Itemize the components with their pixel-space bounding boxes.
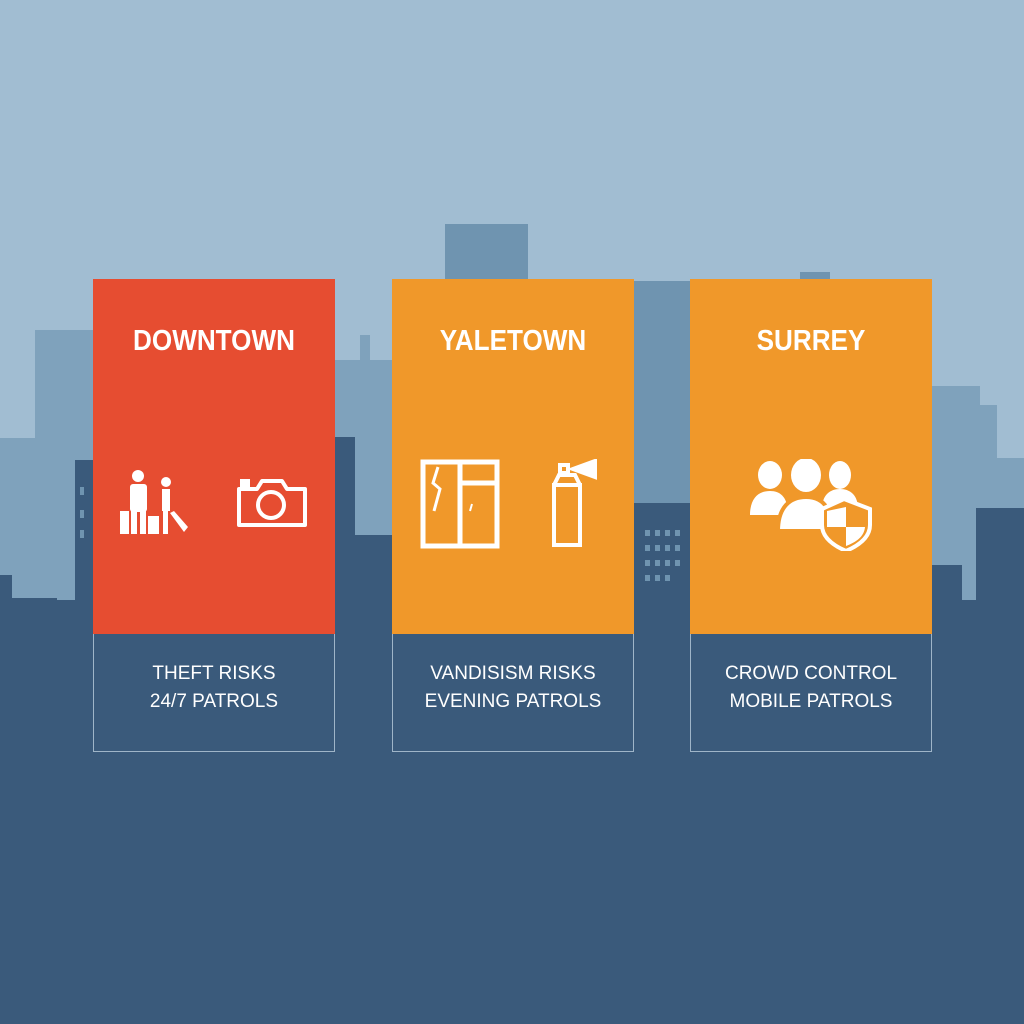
- icon: crowd with shield: [750, 459, 872, 551]
- icon: travelers with luggage: [120, 470, 188, 534]
- text block: downtown: [93, 634, 335, 752]
- panel: yaletown: [392, 279, 634, 634]
- text block: downtown: 24/7 PATROLS: [150, 691, 278, 712]
- heading: yaletown: YALETOWN: [440, 325, 586, 357]
- panel: downtown: [93, 279, 335, 634]
- icon: camera: [237, 479, 307, 527]
- text block: surrey: CROWD CONTROL: [725, 663, 897, 684]
- text block: yaletown: [392, 634, 634, 752]
- text block: downtown: THEFT RISKS: [152, 663, 276, 684]
- text block: surrey: MOBILE PATROLS: [730, 691, 892, 712]
- heading: surrey: SURREY: [757, 325, 865, 357]
- text block: yaletown: EVENING PATROLS: [425, 691, 601, 712]
- icon: broken window: [420, 460, 500, 548]
- icon: spray can: [552, 459, 597, 547]
- heading: downtown: DOWNTOWN: [133, 325, 295, 357]
- text block: yaletown: VANDISISM RISKS: [430, 663, 596, 684]
- panel: surrey: [690, 279, 932, 634]
- text block: surrey: [690, 634, 932, 752]
